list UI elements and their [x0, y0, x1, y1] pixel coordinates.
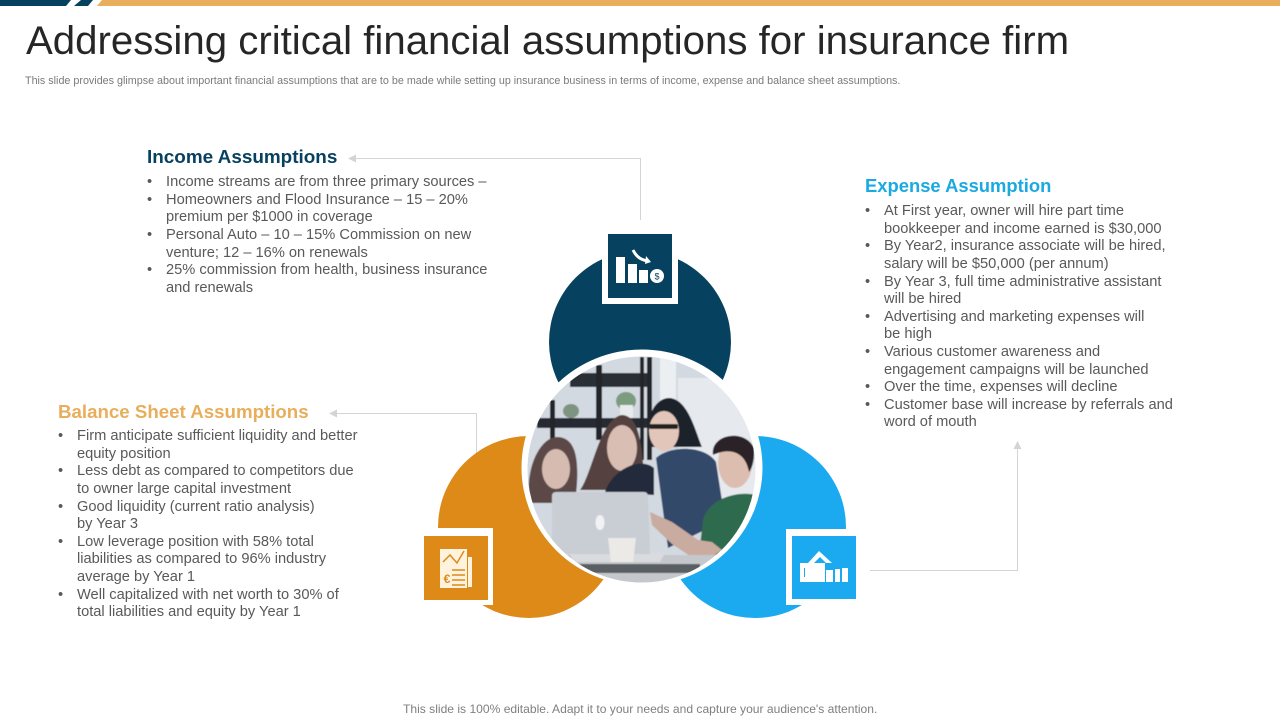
person 2: [580, 415, 645, 490]
text block: balance sheet assumptions: •: [58, 534, 63, 550]
circle: expense: [664, 436, 846, 618]
person 3: [649, 398, 702, 447]
text block: income assumptions: and renewals: [166, 280, 253, 296]
connector arrow: income: [348, 154, 640, 220]
table: [568, 554, 717, 582]
text block: income assumptions: •: [147, 192, 152, 208]
text block: income assumptions: •: [147, 174, 152, 190]
title: Addressing critical financial assumptions for insurance firm: [26, 18, 1069, 63]
text block: expense assumption: Advertising and marketing expenses will: [884, 309, 1144, 325]
top accent bar: [0, 0, 1280, 6]
footer note: This slide is 100% editable. Adapt it to your needs and capture your audience's attention.: [403, 702, 877, 716]
text block: income assumptions: venture; 12 – 16% on renewals: [166, 245, 368, 261]
text block: balance sheet assumptions: Low leverage position with 58% total: [77, 534, 314, 550]
central photo: [520, 350, 765, 590]
text block: expense assumption: be high: [884, 326, 932, 342]
text block: balance sheet assumptions: equity position: [77, 446, 171, 462]
text block: balance sheet assumptions: •: [58, 587, 63, 603]
person 4: [700, 493, 753, 556]
text block: balance sheet assumptions: •: [58, 428, 63, 444]
text block: income assumptions: •: [147, 227, 152, 243]
text block: income assumptions: Income streams are from three primary sources –: [166, 174, 487, 190]
text block: balance sheet assumptions: •: [58, 499, 63, 515]
text block: balance sheet assumptions: average by Year 1: [77, 569, 195, 585]
icon: balance sheet document: €: [444, 572, 451, 586]
text block: expense assumption: engagement campaigns will be launched: [884, 362, 1149, 378]
text block: expense assumption: bookkeeper and income earned is $30,000: [884, 221, 1162, 237]
heading: expense assumption: Expense Assumption: [865, 175, 1051, 196]
icon: expense money: [786, 529, 863, 605]
text block: balance sheet assumptions: to owner large capital investment: [77, 481, 291, 497]
icon: income chart falling: $: [654, 272, 660, 282]
text block: balance sheet assumptions: Good liquidity (current ratio analysis): [77, 499, 315, 515]
text block: expense assumption: •: [865, 203, 870, 219]
text block: expense assumption: •: [865, 309, 870, 325]
circle: income: [549, 251, 731, 433]
shelves: [570, 373, 648, 387]
text block: balance sheet assumptions: [58, 428, 358, 620]
text block: balance sheet assumptions: Well capitalized with net worth to 30% of: [77, 587, 339, 603]
text block: expense assumption: By Year2, insurance associate will be hired,: [884, 238, 1166, 254]
text block: expense assumption: •: [865, 379, 870, 395]
text block: expense assumption: •: [865, 344, 870, 360]
text block: income assumptions: 25% commission from health, business insurance: [166, 262, 487, 278]
text block: expense assumption: •: [865, 274, 870, 290]
text block: income assumptions: Personal Auto – 10 – 15% Commission on new: [166, 227, 471, 243]
text block: balance sheet assumptions: by Year 3: [77, 516, 138, 532]
laptop: [552, 492, 650, 554]
connector arrow: expense: [870, 441, 1022, 570]
text block: expense assumption: word of mouth: [884, 414, 977, 430]
text block: income assumptions: Homeowners and Flood Insurance – 15 – 20%: [166, 192, 468, 208]
text block: income assumptions: premium per $1000 in coverage: [166, 209, 373, 225]
text block: balance sheet assumptions: liabilities as compared to 96% industry: [77, 551, 326, 567]
circle: balance sheet: [438, 436, 620, 618]
text block: expense assumption: will be hired: [884, 291, 961, 307]
heading: balance sheet assumptions: Balance Sheet Assumptions: [58, 401, 309, 422]
text block: balance sheet assumptions: Firm anticipate sufficient liquidity and better: [77, 428, 357, 444]
text block: balance sheet assumptions: •: [58, 463, 63, 479]
text block: expense assumption: salary will be $50,000 (per annum): [884, 256, 1109, 272]
subtitle: This slide provides glimpse about important financial assumptions that are to be made while setting up insurance business in terms of income, expense and balance sheet assumptions.: [25, 75, 900, 87]
text block: expense assumption: •: [865, 238, 870, 254]
text block: balance sheet assumptions: Less debt as compared to competitors due: [77, 463, 354, 479]
text block: expense assumption: Over the time, expenses will decline: [884, 379, 1118, 395]
heading: income assumptions: Income Assumptions: [147, 147, 337, 168]
connector arrow: balance sheet: [329, 410, 476, 470]
text block: expense assumption: •: [865, 397, 870, 413]
text block: expense assumption: By Year 3, full time administrative assistant: [884, 274, 1162, 290]
text block: income assumptions: •: [147, 262, 152, 278]
text block: income assumptions: [147, 174, 487, 296]
text block: expense assumption: [865, 203, 1173, 430]
text block: expense assumption: Various customer awareness and: [884, 344, 1100, 360]
person 1: [529, 437, 577, 503]
icon: balance sheet document: [417, 528, 493, 605]
venn diagram: [329, 154, 1022, 618]
icon: income chart falling: [602, 228, 678, 304]
text block: expense assumption: At First year, owner will hire part time: [884, 203, 1124, 219]
text block: expense assumption: Customer base will increase by referrals and: [884, 397, 1173, 413]
text block: balance sheet assumptions: total liabilities and equity by Year 1: [77, 604, 301, 620]
